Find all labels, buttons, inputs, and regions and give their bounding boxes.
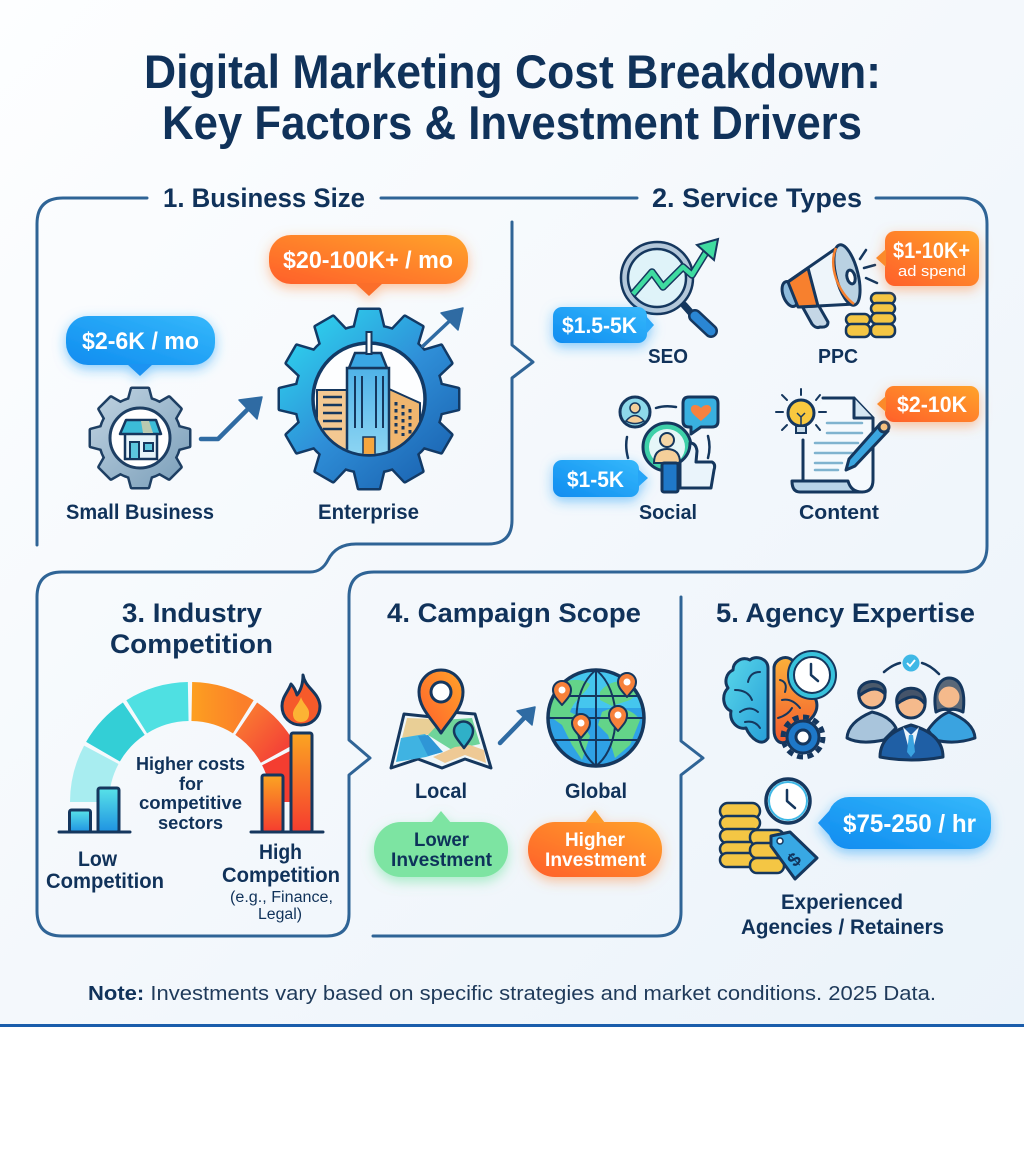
price pill: social — [553, 460, 648, 497]
label: low competition: Low — [78, 848, 118, 871]
title: Key Factors & Investment Drivers — [162, 96, 862, 149]
icon: ppc megaphone — [779, 242, 895, 337]
arrow: local to global — [500, 707, 535, 743]
panel outlines — [37, 198, 987, 936]
label: content: Content — [799, 502, 879, 524]
heading: service types: 2. Service Types — [652, 183, 862, 213]
panel: service types — [553, 183, 979, 524]
title — [144, 45, 881, 149]
pill: lower investment: Investment — [391, 850, 493, 871]
label: experienced agencies: Agencies / Retainers — [741, 916, 944, 939]
gauge caption: sectors — [158, 813, 223, 833]
pill: lower investment — [374, 811, 508, 877]
pill: lower investment: Lower — [414, 830, 470, 851]
icon: local map — [391, 670, 491, 768]
price pill: ppc — [876, 231, 979, 286]
label: high competition: Legal) — [258, 906, 302, 923]
label: high competition: High — [259, 841, 302, 864]
gauge caption: Higher costs — [136, 754, 245, 774]
icon: social — [620, 397, 718, 492]
panel: business size — [66, 183, 470, 524]
label: small business: Small Business — [66, 501, 214, 524]
gauge caption: for — [179, 774, 203, 794]
heading: campaign scope: 4. Campaign Scope — [387, 598, 641, 628]
panel: campaign scope — [374, 598, 662, 877]
label: social: Social — [639, 502, 697, 524]
label: low competition: Competition — [46, 870, 164, 893]
gauge caption — [136, 754, 245, 833]
price pill: small business: $2-6K / mo — [82, 328, 199, 355]
icon: coins with clock and price tag — [720, 779, 817, 879]
bottom rule — [0, 1024, 1024, 1027]
arrow: enterprise growth — [423, 308, 463, 346]
price pill: enterprise — [269, 235, 468, 296]
price pill: agency rate: $75-250 / hr — [843, 810, 976, 838]
label: low competition — [46, 848, 164, 893]
heading: industry competition: 3. Industry — [122, 598, 262, 628]
label: ppc: PPC — [818, 346, 858, 368]
label: high competition: (e.g., Finance, — [230, 889, 333, 906]
pill: higher investment — [528, 810, 662, 877]
icon: small business gear — [88, 386, 192, 490]
icon: globe with pins — [548, 670, 644, 766]
icon: seo magnifier — [621, 239, 718, 331]
gauge — [90, 702, 290, 802]
price pill: small business — [66, 316, 215, 376]
pill: higher investment: Investment — [545, 850, 647, 871]
price pill: content — [877, 386, 979, 422]
icon: content document — [776, 389, 889, 492]
price pill: content: $2-10K — [897, 392, 968, 417]
arrow: small to enterprise — [201, 397, 262, 439]
label: seo: SEO — [648, 346, 688, 368]
price pill: social: $1-5K — [567, 467, 625, 492]
panel: agency expertise — [716, 598, 991, 939]
icon: enterprise gear — [278, 308, 460, 490]
panel: industry competition — [46, 598, 340, 923]
label: experienced agencies: Experienced — [781, 891, 903, 914]
label: high competition — [222, 841, 340, 923]
label: global: Global — [565, 780, 627, 803]
price pill: ppc: $1-10K+ — [893, 238, 970, 263]
gauge caption: competitive — [139, 793, 242, 813]
heading: industry competition — [110, 598, 273, 659]
price pill: seo — [553, 307, 654, 343]
icon: team of experts — [847, 654, 975, 760]
heading: business size: 1. Business Size — [163, 183, 365, 213]
heading: agency expertise: 5. Agency Expertise — [716, 598, 975, 628]
bars: high competition — [251, 733, 323, 832]
bars: low competition — [59, 788, 130, 832]
label: high competition: Competition — [222, 864, 340, 887]
price pill: ppc: ad spend — [898, 263, 966, 280]
label: local: Local — [415, 780, 467, 803]
label: enterprise: Enterprise — [318, 501, 419, 524]
pill: higher investment: Higher — [565, 830, 626, 851]
price pill: agency rate — [818, 797, 991, 849]
label: experienced agencies — [741, 891, 944, 939]
icon: coins with clock and price tag: $ — [784, 849, 806, 871]
price pill: enterprise: $20-100K+ / mo — [283, 247, 453, 274]
title: Digital Marketing Cost Breakdown: — [144, 45, 881, 98]
price pill: seo: $1.5-5K — [562, 313, 638, 338]
icon: flame — [282, 675, 320, 725]
icon: brain with clock and gear — [724, 654, 833, 757]
heading: industry competition: Competition — [110, 629, 273, 659]
note: Note: Investments vary based on specific strategies and market conditions. 2025 Data. — [88, 983, 936, 1005]
